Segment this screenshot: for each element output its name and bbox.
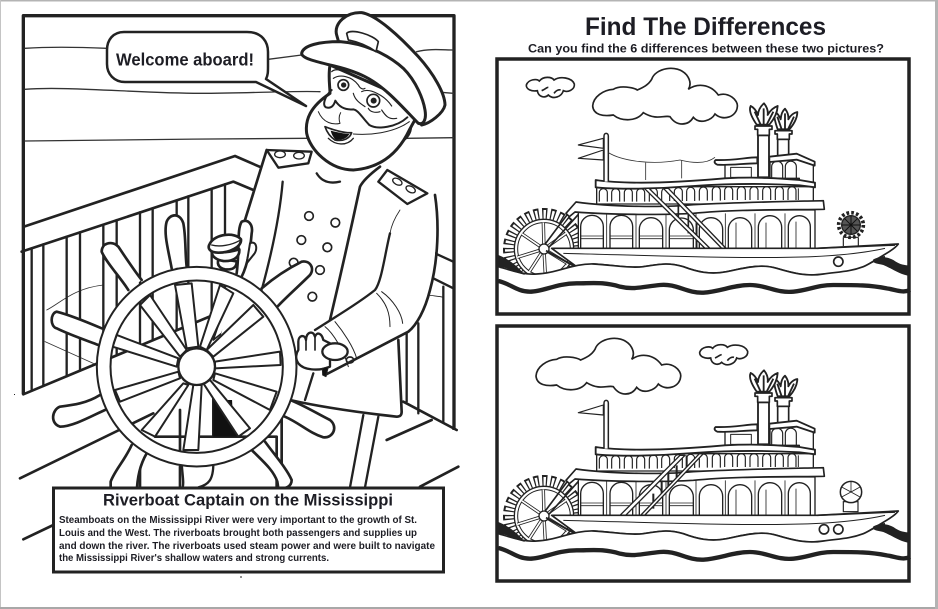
riverboat	[509, 103, 824, 284]
fan on stand	[840, 481, 862, 512]
head and beard	[306, 65, 417, 170]
hull and water	[498, 244, 910, 300]
speech bubble: welcome aboard: Welcome aboard!	[116, 50, 254, 70]
right side railing	[403, 253, 457, 430]
hull and water	[498, 511, 910, 567]
epaulettes	[267, 150, 427, 204]
single pennant flag	[578, 405, 603, 415]
big cloud top left	[536, 338, 681, 394]
picture frame	[23, 16, 454, 430]
ship wheel ornament	[839, 213, 863, 246]
wheel handles	[52, 215, 334, 493]
small cloud	[700, 345, 748, 365]
trousers	[182, 415, 378, 487]
caption body text: Steamboats on the Mississippi River were very important to the growth of St.	[59, 514, 417, 526]
wheel spokes	[113, 283, 281, 450]
sky and river lines	[25, 47, 453, 363]
bottom picture frame	[497, 326, 909, 581]
cap	[302, 13, 445, 125]
caption box: riverboat captain on the mississippi	[54, 488, 444, 572]
panel: top riverboat picture	[497, 59, 910, 314]
top riverboat drawing	[498, 68, 910, 300]
wheel hub	[178, 348, 215, 385]
deck box and black shadow	[130, 305, 282, 487]
speech bubble: welcome aboard	[107, 32, 306, 106]
stairs sloping down to the right	[644, 188, 728, 250]
captain scene illustration	[20, 13, 458, 539]
subheading: instructions: Can you find the 6 differences between these two pictures?	[528, 42, 884, 56]
caption heading: Riverboat Captain on the Mississippi	[103, 490, 393, 510]
wheel rim	[104, 274, 290, 460]
caption body text: the Mississippi River's shallow waters and strong currents.	[59, 552, 329, 564]
ship wheel	[52, 215, 334, 493]
heading: find the differences: Find The Differences	[585, 13, 826, 41]
riverboat	[509, 370, 824, 551]
panel: bottom riverboat picture	[497, 326, 910, 581]
porthole	[834, 257, 843, 266]
panel: riverboat captain colouring page	[14, 13, 458, 578]
big cloud	[593, 68, 737, 124]
bottom riverboat drawing	[498, 338, 910, 567]
stairs sloping down to the left	[620, 454, 703, 516]
caption body text: and down the river. The riverboats used steam power and were built to navigate	[59, 540, 435, 552]
buttons	[289, 212, 340, 301]
railing	[22, 156, 263, 394]
awning rope	[608, 153, 715, 180]
caption body text: Louis and the West. The riverboats brought both passengers and supplies up	[59, 527, 417, 539]
deck floor lines	[20, 413, 458, 539]
small cloud top left	[526, 77, 574, 97]
captain left hand fist	[209, 235, 241, 269]
two portholes	[819, 525, 843, 534]
two pennant flags	[578, 138, 603, 160]
caption body text	[59, 514, 435, 564]
top picture frame	[497, 59, 909, 314]
coat	[213, 150, 438, 417]
captain right hand	[296, 333, 348, 377]
